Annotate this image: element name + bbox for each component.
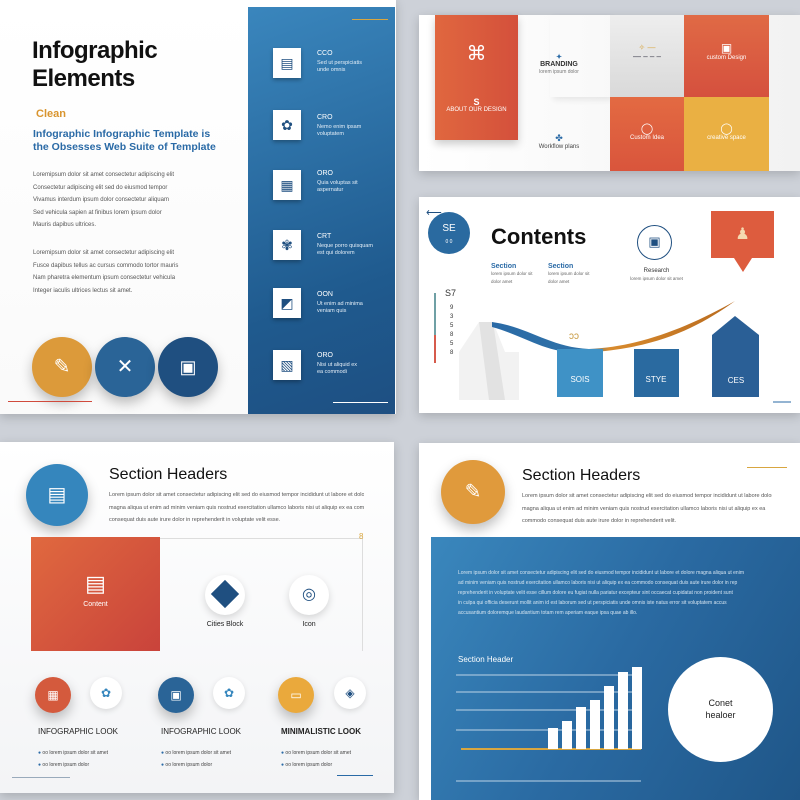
yellow block: creative space xyxy=(707,135,746,141)
ribbon chart: CES xyxy=(728,376,744,385)
title: Elements xyxy=(32,65,135,92)
body text 1: Vivamus interdum ipsum dolor consectetur aliquam xyxy=(33,197,169,203)
list item 6: ▧ xyxy=(280,357,294,373)
blue strip: est qui dolorem xyxy=(317,250,355,256)
sub items: lorem ipsum dolor sit xyxy=(491,271,533,276)
orange block: Custom Idea xyxy=(630,135,664,141)
chart label: Section Header xyxy=(458,655,513,664)
white circle xyxy=(668,657,773,762)
yellow block: ◯ xyxy=(720,123,733,135)
body text 2: Nam pharetra elementum ipsum consectetur vehicula xyxy=(33,275,175,281)
bottom row icons: ● oo lorem ipsum dolor sit amet xyxy=(38,750,108,756)
bottom row icons: ● oo lorem ipsum dolor xyxy=(161,762,212,768)
blue strip xyxy=(248,7,395,414)
heading: contents: Contents xyxy=(491,224,586,249)
list item 1 xyxy=(273,48,301,78)
orange block: ◯ xyxy=(641,123,653,135)
panel: contents xyxy=(419,197,800,413)
bottom row icons: ● oo lorem ipsum dolor xyxy=(281,762,332,768)
blue strip: Nemo enim ipsam xyxy=(317,124,361,130)
number circle: 0 0 xyxy=(446,239,452,245)
panel: color blocks: ✦ xyxy=(556,54,562,61)
yellow block xyxy=(684,97,769,171)
text block item xyxy=(202,580,248,628)
number circle: SE xyxy=(442,223,456,234)
heading: Section Headers xyxy=(522,467,640,484)
ribbon chart: ↄↄ xyxy=(569,331,579,342)
body text: reprehenderit in voluptate velit esse cillum dolore eu fugiat nulla pariatur excepteur sint occaecat cupidatat non proident sunt xyxy=(458,590,733,596)
blue strip: voluptatem xyxy=(317,131,344,137)
red block xyxy=(684,15,769,97)
connector xyxy=(160,538,362,539)
icon item: ◎ xyxy=(302,586,316,603)
icon: dark blue circle: ▣ xyxy=(179,357,196,377)
bottom row icons: ✿ xyxy=(101,686,111,700)
list item 3: ▦ xyxy=(280,177,294,193)
list item 6 xyxy=(273,350,301,380)
text: Lorem ipsum dolor sit amet consectetur adipiscing elit sed do eiusmod tempor incididunt ut labore et dolore xyxy=(109,492,364,498)
white circle: Conet xyxy=(708,698,733,708)
orange tall card: ABOUT OUR DESIGN xyxy=(446,107,507,113)
grey block xyxy=(610,15,684,97)
bottom row icons: ● oo lorem ipsum dolor sit amet xyxy=(161,750,231,756)
panel: section headers left: 8 xyxy=(359,532,363,541)
panel: infographic elements xyxy=(0,0,396,414)
panel: color blocks xyxy=(419,15,800,171)
orange block xyxy=(610,97,684,171)
orange tall card: S xyxy=(473,97,480,107)
bottom row icons: ● oo lorem ipsum dolor sit amet xyxy=(281,750,351,756)
subtitle: clean: Clean xyxy=(36,108,66,120)
body text xyxy=(458,570,744,616)
blue strip: Quia voluptas sit xyxy=(317,180,358,186)
sub items xyxy=(491,262,533,284)
sub items: dolor amet xyxy=(491,279,512,284)
text xyxy=(522,493,772,524)
body text 1 xyxy=(33,172,174,228)
icon circles xyxy=(26,337,224,409)
body text: ad minim veniam quis nostrud exercitation ullamco laboris nisi ut aliquip ex ea commodo consequat duis aute irure dolor in rep xyxy=(458,580,737,586)
panel: color blocks: BRANDING xyxy=(540,61,578,68)
bottom row icons: INFOGRAPHIC LOOK xyxy=(38,727,118,736)
text: commodo consequat duis aute irure dolor in reprehenderit velit. xyxy=(522,518,676,524)
bottom row icons: ▣ xyxy=(170,688,182,702)
bottom row icons: INFOGRAPHIC LOOK xyxy=(161,727,241,736)
text: magna aliqua ut enim ad minim veniam quis nostrud exercitation ullamco laboris nisi ut aliquip ex ea xyxy=(522,506,765,512)
blue strip: CCO xyxy=(317,50,333,57)
icon: blue circle xyxy=(95,337,155,397)
number circle xyxy=(428,212,470,254)
red block: custom Design xyxy=(707,55,746,61)
blue strip: ORO xyxy=(317,352,333,359)
panel: color blocks: lorem ipsum dolor xyxy=(539,69,579,75)
blue strip: Sed ut perspiciatis xyxy=(317,60,362,66)
list item 2: ✿ xyxy=(281,117,293,133)
orange tall card xyxy=(435,15,518,140)
callout: ♟ xyxy=(735,226,750,243)
body text 1: Consectetur adipiscing elit sed do eiusmod tempor xyxy=(33,184,167,190)
panel: color blocks: Workflow plans xyxy=(539,144,579,150)
grey block: ✧ — xyxy=(639,43,655,52)
text: Lorem ipsum dolor sit amet consectetur adipiscing elit sed do eiusmod tempor incididunt ut labore dolore xyxy=(522,493,772,499)
accent line xyxy=(8,401,92,402)
orange content square: Content xyxy=(83,601,108,608)
list item 3 xyxy=(273,170,301,200)
body text: Lorem ipsum dolor sit amet consectetur adipiscing elit sed do eiusmod tempor incididunt ut labore et dolore magna aliqua ut enim xyxy=(458,570,744,576)
body text 1: Mauris dapibus ultrices. xyxy=(33,222,96,228)
heading: Section Headers xyxy=(109,466,227,483)
panel: contents: 5 xyxy=(450,341,453,347)
bottom row icons: ▦ xyxy=(47,688,59,702)
panel: contents: 9 xyxy=(450,305,453,311)
panel: contents: 8 xyxy=(450,332,453,338)
body text 2: Integer iaculis ultrices lectus sit amet. xyxy=(33,288,132,294)
blue strip: Nisi ut aliquid ex xyxy=(317,362,357,368)
blue strip: aspernatur xyxy=(317,187,343,193)
bar chart xyxy=(456,667,642,782)
blue strip: CRT xyxy=(317,233,331,240)
panel: contents: lorem ipsum dolor sit amet xyxy=(630,276,683,281)
white circle: healoer xyxy=(705,710,736,720)
ribbon chart: STYE xyxy=(646,375,666,384)
blue strip: unde omnis xyxy=(317,67,345,73)
title: Infographic xyxy=(32,37,157,64)
blue subtitle: the Obsesses Web Suite of Template xyxy=(33,141,216,153)
bottom row icons: ✿ xyxy=(224,686,234,700)
red block: ▣ xyxy=(721,41,732,55)
list item 1: ▤ xyxy=(280,55,294,71)
body text 2: Loremipsum dolor sit amet consectetur adipiscing elit xyxy=(33,250,174,256)
text xyxy=(109,492,364,523)
icon outline circle xyxy=(637,225,672,260)
header circle icon xyxy=(441,460,505,524)
bottom row icons: ▭ xyxy=(290,688,302,702)
arrow: ⟵ xyxy=(426,207,442,219)
header circle icon xyxy=(26,464,88,526)
callout xyxy=(711,211,774,272)
body text 2: Fusce dapibus tellus ac cursus commodo tortor mauris xyxy=(33,262,178,268)
orange content square: ▤ xyxy=(85,571,106,596)
body text: in culpa qui officia deserunt mollit anim id est laborum sed ut perspiciatis unde omnis iste natus error sit voluptatem accus xyxy=(458,600,727,606)
sub items: Section xyxy=(491,263,516,270)
list item 5 xyxy=(273,288,301,318)
header circle icon: ✎ xyxy=(465,481,481,503)
panel: contents: lorem ipsum dolor sit xyxy=(548,271,590,276)
icon item: Icon xyxy=(302,621,316,628)
text block item: Cities Block xyxy=(207,621,243,628)
panel: section headers left xyxy=(0,442,394,793)
list item 4 xyxy=(273,230,301,260)
blue strip: veniam quis xyxy=(317,308,346,314)
bottom row icons: ● oo lorem ipsum dolor xyxy=(38,762,89,768)
blue subtitle: Infographic Infographic Template is xyxy=(33,128,210,140)
panel: contents: 8 xyxy=(450,350,453,356)
panel: contents: dolor amet xyxy=(548,279,569,284)
orange tall card: ⌘ xyxy=(466,43,486,65)
panel: contents: Section xyxy=(548,263,573,270)
panel: contents: 3 xyxy=(450,314,453,320)
bottom row icons: ◈ xyxy=(345,686,355,700)
icon: blue circle: ✕ xyxy=(117,356,133,378)
bottom row icons xyxy=(30,677,368,768)
bottom row icons: MINIMALISTIC LOOK xyxy=(281,727,361,736)
grey block: — – – – xyxy=(633,52,661,61)
icon item xyxy=(286,581,332,628)
panel: section headers right xyxy=(419,443,800,800)
orange content square xyxy=(31,537,160,651)
blue content area xyxy=(431,537,800,800)
icon: dark blue circle xyxy=(158,337,218,397)
body text 1: Loremipsum dolor sit amet consectetur adipiscing elit xyxy=(33,172,174,178)
icon: orange circle: ✎ xyxy=(54,356,70,378)
blue strip: ORO xyxy=(317,170,333,177)
panel: contents: S7 xyxy=(445,288,456,298)
title xyxy=(32,37,157,92)
list item 4: ✾ xyxy=(281,237,293,253)
ribbon chart: SOIS xyxy=(570,375,590,384)
white block label xyxy=(550,15,610,97)
body text: accusantium doloremque laudantium totam rem aperiam eaque ipsa quae ab illo. xyxy=(458,610,637,616)
body text 1: Sed vehicula sapien at finibus lorem ipsum dolor xyxy=(33,210,162,216)
icon: orange circle xyxy=(32,337,92,397)
ribbon chart xyxy=(459,301,791,402)
list item 5: ◩ xyxy=(280,295,294,311)
blue strip: Neque porro quisquam xyxy=(317,243,373,249)
body text 2 xyxy=(33,250,178,294)
icon outline circle: ▣ xyxy=(648,234,661,249)
header circle icon: ▤ xyxy=(48,484,66,506)
blue subtitle xyxy=(33,128,216,153)
text: consequat duis aute irure dolor in reprehenderit in voluptate velit esse. xyxy=(109,517,280,523)
axis xyxy=(434,293,436,363)
blue strip: OON xyxy=(317,291,333,298)
blue strip: ea commodi xyxy=(317,369,347,375)
panel: contents: Research xyxy=(644,268,669,274)
list item 2 xyxy=(273,110,301,140)
blue strip: CRO xyxy=(317,114,333,121)
blue strip: Ut enim ad minima xyxy=(317,301,363,307)
panel: contents: 5 xyxy=(450,323,453,329)
panel: color blocks: ✤ xyxy=(555,133,563,143)
